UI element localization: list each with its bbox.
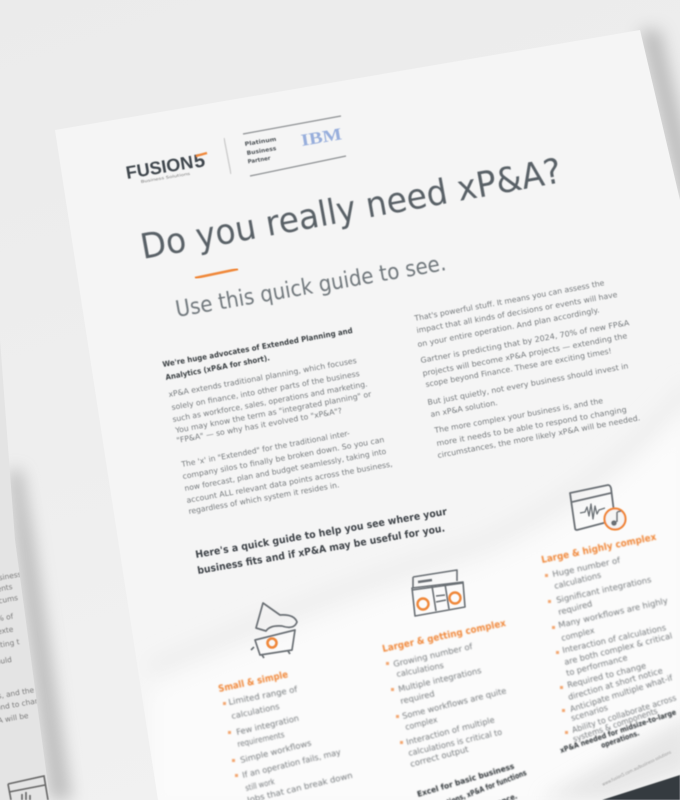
text block: intro left column: The 'x' in "Extended" for the traditional inter- — [180, 429, 351, 469]
bullet list: larger and getting complex: required — [399, 688, 436, 706]
partner badge: IBM — [300, 124, 343, 150]
bullet list: large and highly complex: direction at short notice — [567, 665, 664, 702]
bullet list: larger and getting complex: calculations is critical to — [407, 727, 503, 758]
dark page corner — [602, 775, 680, 800]
bullet list: small and simple: still work — [244, 776, 276, 793]
bullet list: larger and getting complex: Some workflows are quite — [401, 685, 507, 721]
guide intro heading: business fits and if xP&A may be useful for you. — [197, 523, 446, 577]
bullet list: large and highly complex: to performance — [565, 652, 628, 678]
icon: boombox — [412, 570, 465, 616]
heading: larger and getting complex: Larger & getting complex — [381, 618, 507, 655]
logo: Fusion5: FUSION — [124, 152, 195, 183]
panel: large and highly complex — [540, 532, 678, 755]
bullet list: small and simple — [223, 684, 353, 800]
logo: Fusion5: Business Solutions — [140, 171, 190, 184]
text block: intro right column: more it needs to be able to respond to changing — [436, 405, 627, 448]
icon: audio window — [570, 485, 626, 530]
text block: intro right column: impact that all kinds of decisions or events will have — [416, 290, 618, 335]
text block: intro left column: such as workforce, sales, operations and marketing. — [172, 379, 368, 424]
text block: intro right column: projects will become xP&A projects — extending the — [422, 331, 628, 378]
text block: intro left column: company silos to finally be broken down. So you can — [182, 435, 385, 481]
right shadow strip — [640, 30, 680, 200]
text block: intro left column: "FP&A" — so why has it evolved to "xP&A"? — [176, 406, 343, 445]
bullet list: large and highly complex: are both complex & critical — [563, 630, 673, 667]
text block: intro left column: We're huge advocates of Extended Planning and — [162, 326, 353, 369]
bullet list: large and highly complex: Required to change — [566, 660, 647, 690]
icon: gramophone — [251, 603, 297, 658]
bullet list: large and highly complex: Many workflows are highly — [557, 595, 669, 630]
text block: intro left column: You may know the term as "integrated planning" or — [174, 389, 373, 435]
bullet list: large and highly complex: scenarios — [570, 702, 609, 723]
text block: intro right column: an xP&A solution. — [430, 398, 498, 419]
partner badge: Business — [246, 146, 278, 157]
text block: intro left column: regardless of which system it resides in. — [188, 480, 340, 516]
partner badge: Platinum — [244, 137, 277, 148]
text block: intro right column: on your entire operation. And plan accordingly. — [417, 305, 600, 349]
text block: intro right column: The more complex your business is, and the — [433, 396, 604, 435]
decorative wave — [574, 728, 680, 796]
bullet list: large and highly complex: Significant integrations — [555, 574, 652, 605]
recommendation: larger: Excel for basic business — [416, 762, 516, 799]
bullet list: larger and getting complex: Multiple integrations — [397, 665, 482, 694]
bullet list: larger and getting complex: calculations — [395, 660, 444, 679]
bullet list: larger and getting complex — [386, 641, 507, 769]
recommendation: large: operations. — [600, 728, 641, 750]
text block: intro right column: But just quietly, not every business should invest in — [427, 361, 629, 407]
panel: larger and getting complex — [381, 618, 528, 800]
bullet list: larger and getting complex: correct output — [409, 744, 470, 769]
bullet list: larger and getting complex: Growing number of — [392, 641, 474, 669]
panel: small and simple — [217, 669, 353, 800]
bullet list: large and highly complex: Anticipate multiple what-if — [569, 672, 675, 714]
bullet list: small and simple: Few integration — [235, 713, 300, 737]
bullet list: large and highly complex: calculations — [553, 570, 602, 591]
bullet list: large and highly complex: Ability to collaborate across — [571, 692, 678, 735]
title: Do you really need xP&A? — [137, 151, 565, 268]
bullet list: small and simple: calculations — [230, 701, 280, 721]
partner badge — [243, 116, 346, 176]
text block: intro right column: circumstances, the more likely xP&A will be needed. — [437, 413, 641, 460]
left page body text — [0, 572, 37, 723]
subtitle: Use this quick guide to see. — [174, 251, 448, 323]
icon: left page window — [8, 776, 48, 800]
title accent rule — [195, 269, 238, 278]
heading: small and simple: Small & simple — [217, 669, 289, 695]
bullet list: large and highly complex — [545, 555, 678, 744]
partner badge: Partner — [247, 156, 271, 165]
text block: intro right column: Gartner is predicting that by 2024, 70% of new FP&A — [420, 318, 631, 365]
bullet list: large and highly complex: systems & components — [571, 705, 659, 744]
bullet list: small and simple: requirements — [236, 729, 285, 749]
bullet list: large and highly complex: Huge number of — [551, 555, 622, 579]
text block: intro left column: now forecast, plan and budget seamlessly, taking into — [184, 447, 387, 493]
logo: Fusion5: 5 — [192, 150, 207, 173]
bullet list: small and simple: Simple workflows — [239, 738, 312, 765]
text block: intro right column: That's powerful stuff. It means you can assess the — [413, 278, 605, 323]
text block: intro right column — [413, 278, 641, 460]
bullet list: small and simple: Limited range of — [227, 684, 299, 707]
bullet list: small and simple: If an operation fails, may — [241, 747, 342, 780]
text block: intro left column — [162, 326, 393, 516]
bullet list: large and highly complex: required — [557, 598, 593, 617]
bullet list: large and highly complex: Interaction of calculations — [561, 622, 667, 655]
guide intro heading: Here's a quick guide to help you see where your — [195, 507, 448, 561]
text block: intro right column: scope beyond Finance. These are exciting times! — [425, 346, 612, 389]
panel: left background page — [0, 340, 72, 800]
text block: intro left column: solely on finance, into other parts of the business — [171, 369, 360, 412]
logo divider — [224, 138, 231, 174]
text block: intro left column: xP&A extends traditional planning, which focuses — [168, 356, 357, 399]
text block: intro left column: account ALL relevant data points across the business, — [186, 459, 393, 505]
bullet list: larger and getting complex: Interaction of multiple — [405, 714, 496, 747]
bullet list: large and highly complex: complex — [560, 625, 596, 643]
bullet list: larger and getting complex: complex — [404, 714, 439, 732]
text block: intro left column: Analytics (xP&A for short). — [165, 353, 271, 382]
footer url: www.fusion5.com.au/business-solutions — [601, 750, 672, 787]
heading: large and highly complex: Large & highly complex — [540, 532, 657, 566]
